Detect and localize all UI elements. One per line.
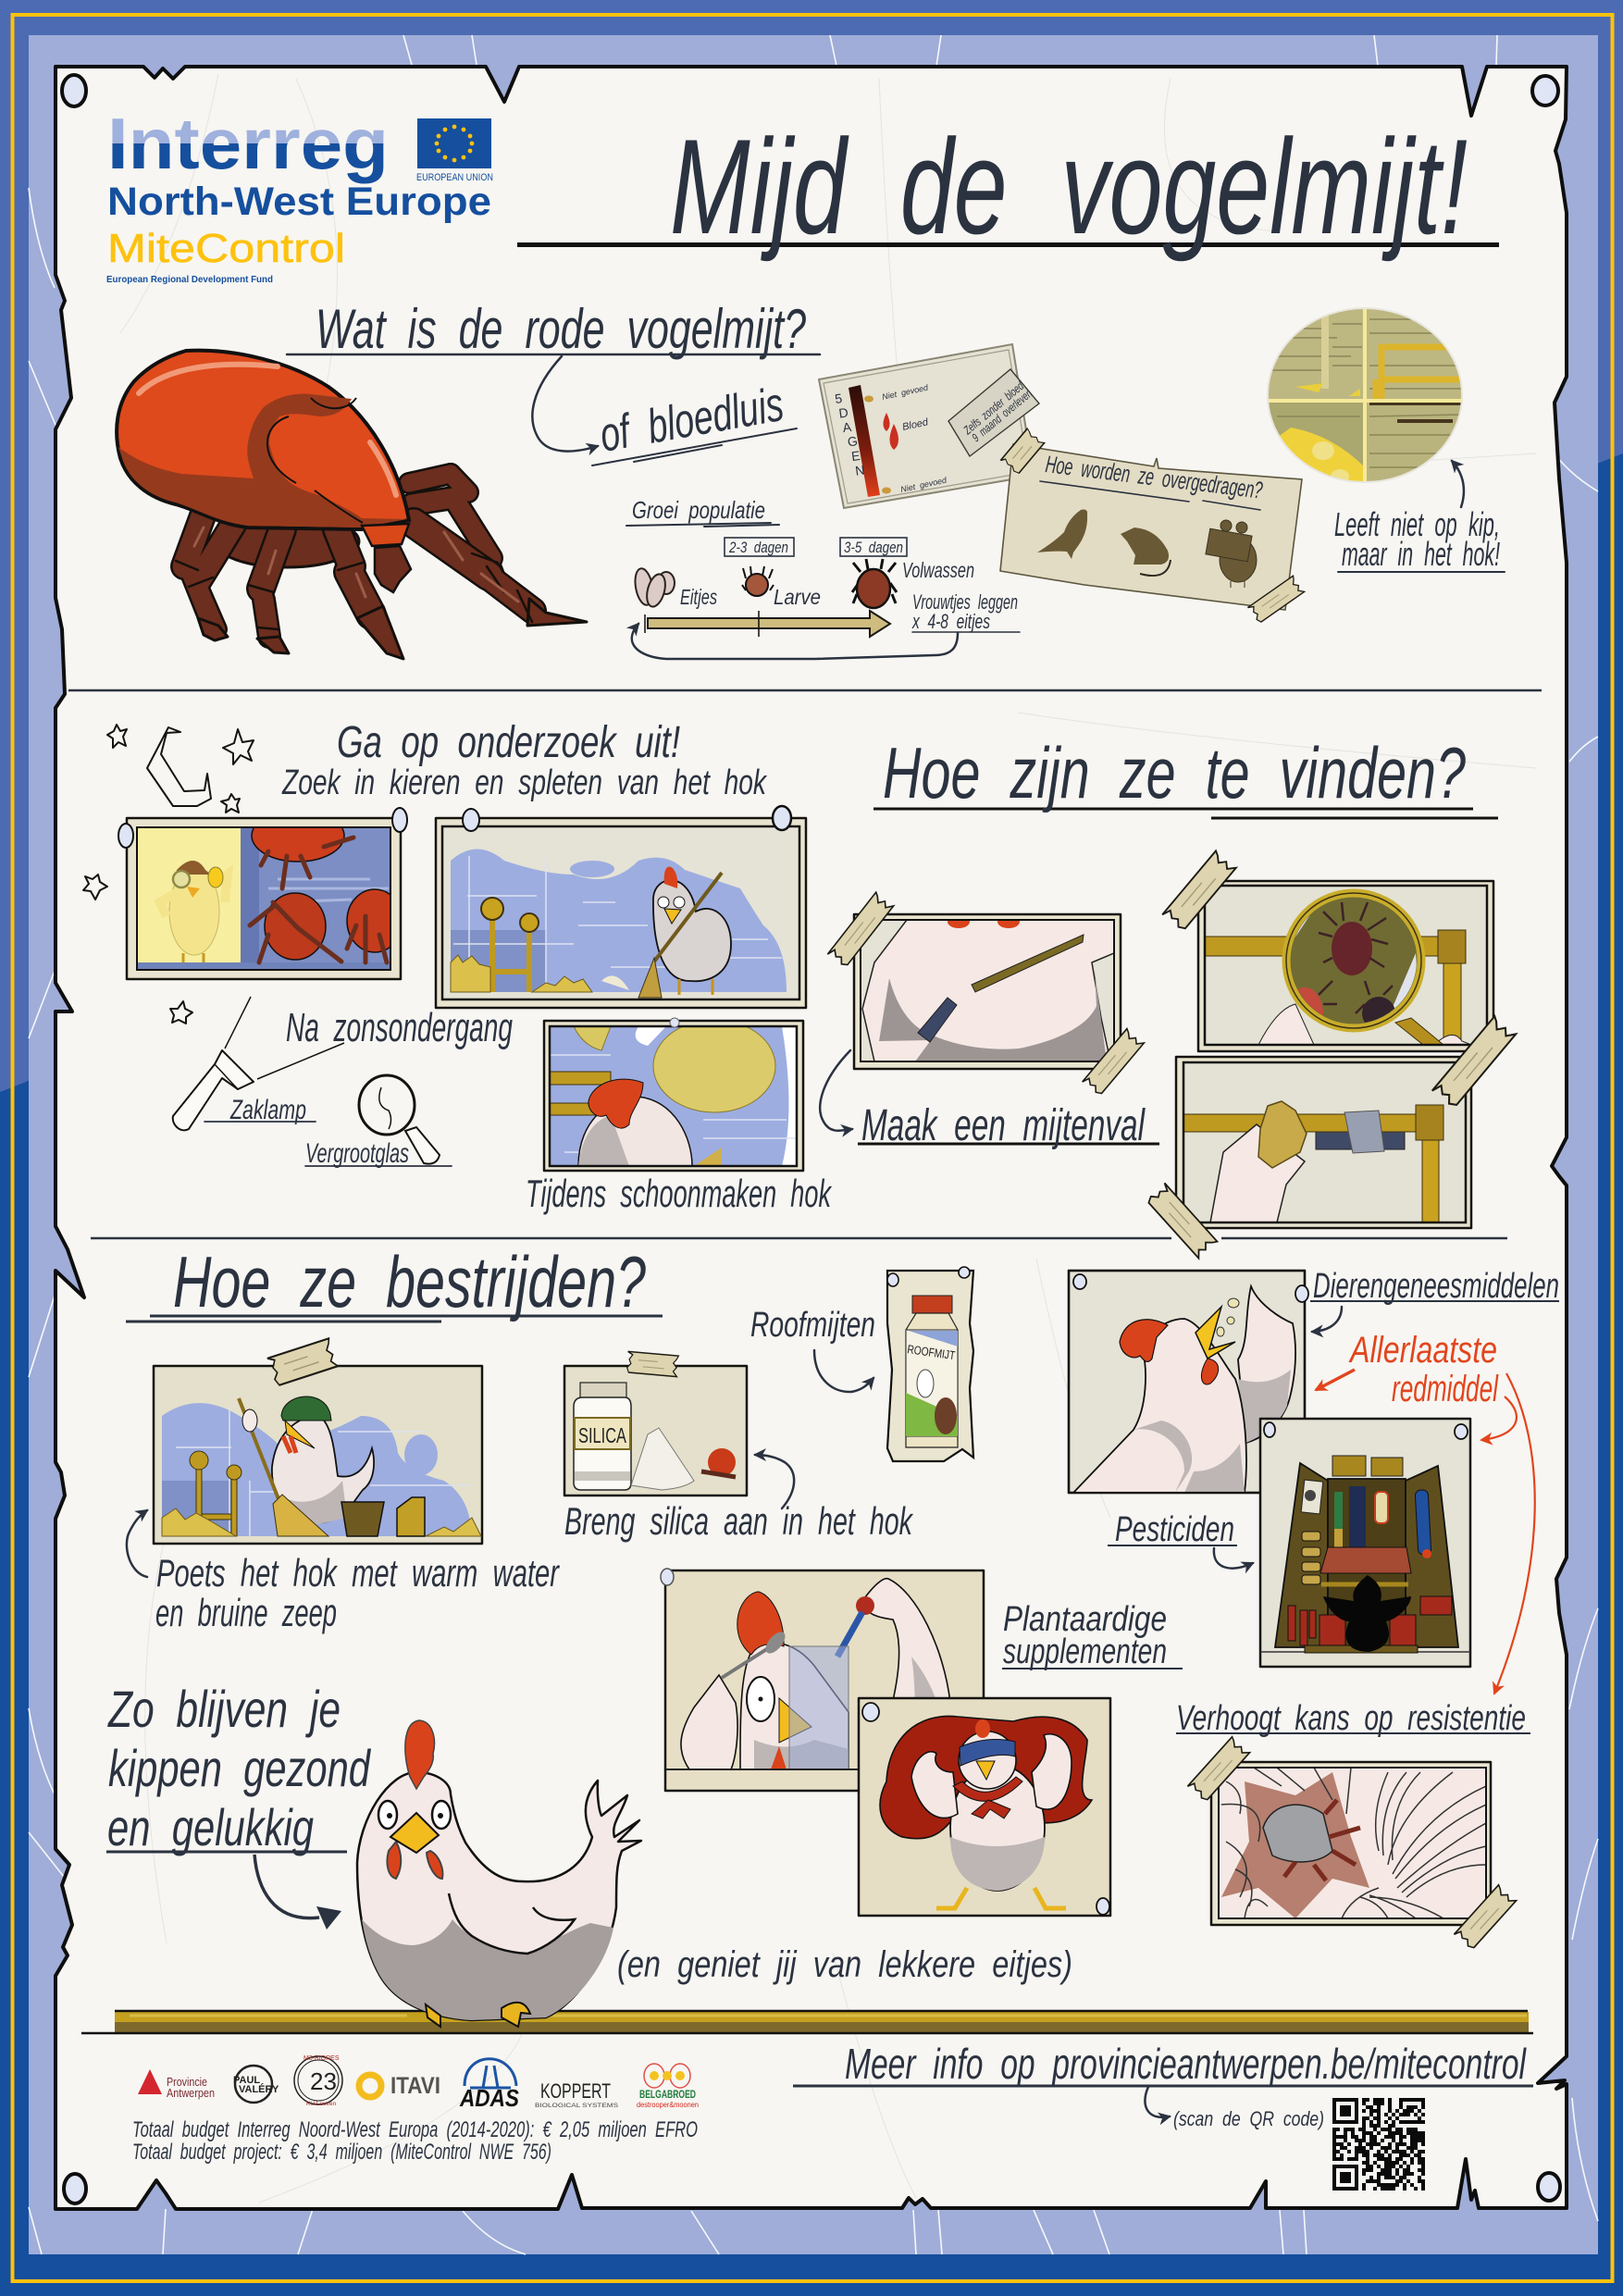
timeline arrow: [645, 611, 890, 637]
logo: Paul Valery: VALÉRY: [239, 2083, 279, 2095]
frame: silica: [564, 1351, 747, 1496]
Interreg logo: MiteControl: [107, 226, 345, 271]
arrow to bloedluis: [532, 356, 598, 452]
Interreg logo: European Regional Development Fund: [106, 274, 273, 285]
card: 5 dagen blood: Niet gevoed: [881, 382, 930, 402]
caption: last resort: redmiddel: [1392, 1369, 1499, 1409]
logo: Provincie Antwerpen: [138, 2069, 215, 2100]
caption: plant supplements: [1002, 1600, 1183, 1671]
frame: cleaning with haystack: [544, 1018, 803, 1171]
logo: Belgabroed: BELGABROED: [639, 2088, 696, 2101]
logo: Provincie Antwerpen: Antwerpen: [167, 2087, 215, 2100]
icon: flashlight: [173, 997, 344, 1130]
label: flashlight: [204, 1095, 316, 1125]
logo: ITAVI: [359, 2073, 440, 2099]
divider: [68, 689, 1542, 691]
caption: clean coop: en bruine zeep: [155, 1591, 337, 1634]
icon: bird: [1037, 510, 1087, 559]
pin: bottom left: [64, 2174, 86, 2203]
caption: make a mite trap: Maak een mijtenval: [861, 1101, 1146, 1150]
card: 5 dagen blood: N: [854, 462, 865, 478]
arrow to silica frame: [755, 1455, 794, 1508]
heading: go investigate: [281, 718, 767, 802]
logo: M3-BIORES: KU Leuven: [306, 2101, 337, 2107]
cabinet: [1275, 1456, 1458, 1653]
icon: round coop views: [1268, 308, 1463, 486]
perch: [81, 2011, 1533, 2033]
note: zonder bloed: [948, 369, 1039, 456]
logo: ITAVI: ITAVI: [390, 2073, 440, 2099]
arrow to predatory mites: [814, 1350, 873, 1392]
card: predatory mite bottle: [887, 1267, 973, 1461]
partner logos: [138, 2055, 699, 2112]
black chick silhouette: [1323, 1575, 1411, 1652]
arrow to big chicken: [254, 1855, 341, 1930]
logo: Koppert: KOPPERT: [540, 2079, 611, 2103]
heading: what is the red mite: Wat is de rode vogelmijt?: [316, 298, 806, 360]
night decoration: moon and stars: [83, 725, 254, 1024]
budget text: Totaal budget project: € 3,4 miljoen (MiteControl NWE 756): [132, 2140, 551, 2165]
icon: EU flag: [417, 118, 491, 168]
detective chick: [160, 861, 228, 962]
card: 5 dagen blood: E: [850, 448, 861, 464]
silica jar: SILICA: [578, 1423, 626, 1447]
caption: stay healthy and happy: en gelukkig: [107, 1798, 314, 1856]
arrow to QR note: [1145, 2087, 1170, 2117]
card: 5 dagen blood: Niet gevoed: [899, 475, 948, 494]
arrow from veterinary medicine: [1312, 1307, 1342, 1332]
icon: magnifying glass: [359, 1075, 440, 1164]
card: how are they transferred: Hoe worden ze overgedragen?: [1044, 450, 1264, 504]
caption: clean coop: Poets het hok met warm water: [156, 1551, 560, 1595]
caption: last resort: [1348, 1330, 1499, 1409]
budget text: Totaal budget Interreg Noord-West Europa (2014-2020): € 2,05 miljoen EFRO: [132, 2117, 698, 2142]
cape: [880, 1716, 1092, 1839]
frame: chicken cleaning coop: [154, 1338, 482, 1544]
arrow to pesticides: [1214, 1548, 1253, 1569]
card: 5 dagen blood: [819, 344, 1039, 508]
caption: plant supplements: supplementen: [1003, 1632, 1167, 1671]
logo: Belgabroed: destrooper&moonen: [637, 2101, 699, 2109]
QR code: [1332, 2100, 1425, 2189]
note: zonder bloed: 9 maand overleven: [969, 386, 1035, 444]
logo: Provincie Antwerpen: Provincie: [167, 2076, 207, 2089]
card: 5 dagen blood: G: [847, 433, 859, 450]
illustration: red mite: [117, 351, 587, 659]
icon: larva: [742, 566, 774, 596]
Interreg logo: North-West Europe: [107, 180, 491, 224]
arrow to coop: [1452, 461, 1464, 507]
caption: scan QR: (scan de QR code): [1173, 2107, 1324, 2130]
caption: during coop cleaning: Tijdens schoonmaken hok: [526, 1172, 832, 1215]
caption: clean coop: [155, 1551, 560, 1634]
caption: silica: Breng silica aan in het hok: [564, 1499, 913, 1543]
logo: Paul Valery: PAUL: [233, 2075, 260, 2086]
jerrycan: [397, 1497, 425, 1536]
icon: chicken with box: [1206, 520, 1257, 588]
Interreg logo: [106, 103, 493, 285]
frame: magnified mites on perch: [1162, 850, 1493, 1051]
card: 5 dagen blood: Bloed: [901, 416, 930, 433]
pin: top right: [1532, 76, 1558, 105]
caption: last resort: Allerlaatste: [1348, 1330, 1497, 1371]
heading: of bloedluis: of bloedluis: [596, 378, 787, 463]
frame: placing mite trap under wing: [827, 892, 1144, 1096]
frame: super chicken: [859, 1698, 1110, 1916]
frame: detective chick and mites: [118, 808, 407, 979]
chicken with broom: [601, 866, 731, 998]
caption: not on chicken but in coop: maar in het hok!: [1342, 535, 1500, 573]
frame: pesticides cabinet: [1260, 1419, 1470, 1667]
silica jar: [574, 1383, 631, 1490]
logo: M3-BIORES: 23: [310, 2067, 337, 2095]
frame: chicken sweeping: [436, 806, 806, 1008]
icon: rat: [1121, 527, 1171, 576]
card: how are they transferred: [1000, 428, 1305, 624]
Interreg logo: Interreg: [107, 103, 389, 184]
growth cycle diagram: Groei populatie: [632, 496, 765, 524]
frame: armored mite in feathers: [1187, 1737, 1517, 1950]
label: flashlight: Zaklamp: [229, 1095, 306, 1125]
bucket: [341, 1502, 384, 1536]
growth cycle diagram: Larve: [774, 585, 821, 609]
caption: not on chicken but in coop: [1334, 505, 1505, 573]
icon: eggs: [633, 567, 675, 609]
frame: chicken with spoon and glass: [661, 1569, 984, 1791]
red arrows: [1316, 1370, 1535, 1694]
label: magnifying glass: Vergrootglas: [305, 1138, 409, 1169]
budget text: [132, 2117, 698, 2165]
heading: go investigate: Ga op onderzoek uit!: [337, 718, 680, 767]
caption: after sunset: Na zonsondergang: [286, 1005, 513, 1050]
pin: top left: [62, 75, 86, 106]
caption: stay healthy and happy: kippen gezond: [108, 1739, 371, 1797]
logo: ADAS: [459, 2059, 520, 2112]
caption: pesticides: Pesticiden: [1115, 1510, 1234, 1549]
pin: bottom right: [1538, 2173, 1560, 2201]
caption: predatory mites: Roofmijten: [750, 1306, 875, 1345]
body: [950, 1765, 1045, 1891]
return arrow: [632, 624, 958, 659]
mites in crack: [248, 828, 390, 964]
note: zonder bloed: Zelfs zonder bloed: [960, 379, 1027, 438]
icon: adult mite: [852, 559, 897, 608]
heading: of bloedluis: [592, 378, 797, 465]
growth cycle diagram: x 4-8 eitjes: [911, 610, 990, 633]
logo: Koppert: [535, 2079, 619, 2109]
divider: [91, 1237, 1507, 1239]
card: 5 dagen blood: A: [842, 419, 853, 435]
frame: veterinary medicine chicken: [1069, 1271, 1308, 1493]
heading: go investigate: Zoek in kieren en spleten van het hok: [281, 763, 767, 802]
chicken with helmet: [239, 1396, 374, 1536]
card: 5 dagen blood: D: [837, 404, 849, 421]
caption: plant supplements: Plantaardige: [1003, 1600, 1167, 1639]
caption: stay healthy and happy: Zo blijven je: [106, 1680, 341, 1738]
frame: trap under perch: [1146, 1016, 1516, 1259]
logo: Paul Valery: [233, 2066, 279, 2103]
Interreg logo: EUROPEAN UNION: [416, 172, 493, 183]
mite legs: [176, 474, 587, 659]
growth cycle diagram: Eitjes: [680, 585, 717, 609]
logo: Belgabroed: [637, 2064, 699, 2109]
caption: and enjoy tasty eggs: (en geniet jij van lekkere eitjes): [617, 1944, 1072, 1985]
caption: not on chicken but in coop: Leeft niet op kip,: [1334, 505, 1500, 543]
logo: M3-BIORES: M3-BIORES: [304, 2055, 340, 2062]
logo: Koppert: BIOLOGICAL SYSTEMS: [535, 2103, 619, 2109]
arrow to mite trap caption: [820, 1050, 852, 1131]
card: predatory mite bottle: ROOFMIJT: [907, 1342, 956, 1362]
arrow to cleaning frame: [127, 1510, 147, 1577]
heading: how to control: Hoe ze bestrijden?: [173, 1241, 646, 1322]
big chicken: [357, 1720, 641, 2027]
growth cycle diagram: Volwassen: [902, 558, 974, 582]
card: 5 dagen blood: 5: [834, 391, 843, 406]
label: 3-5 dagen: 3-5 dagen: [844, 539, 903, 556]
label: 2-3 dagen: 2-3 dagen: [728, 539, 788, 556]
caption: stay healthy and happy: [106, 1680, 371, 1856]
logo: M3-BIORES: [294, 2055, 342, 2107]
growth cycle diagram: Vrouwtjes leggen: [912, 590, 1018, 614]
growth cycle diagram: [626, 496, 1020, 659]
logo: ADAS: ADAS: [459, 2084, 520, 2112]
